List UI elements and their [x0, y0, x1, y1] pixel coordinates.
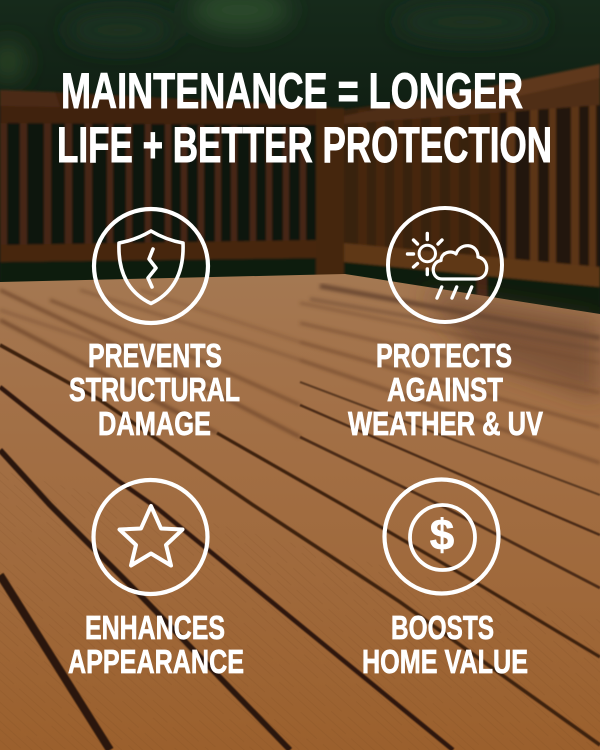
benefit: prevents structural damage [69, 209, 240, 443]
label: enhances appearance: APPEARANCE [68, 644, 244, 681]
deck shadows at far end [420, 290, 600, 400]
label: prevents structural damage: DAMAGE [98, 406, 211, 443]
label: protects against weather and UV: AGAINST [387, 372, 503, 409]
label: protects against weather and UV [348, 338, 543, 443]
title [57, 62, 552, 173]
benefit: protects against weather and UV [348, 208, 543, 443]
label: protects against weather and UV: PROTECTS [376, 338, 512, 375]
background: railing [0, 64, 600, 320]
label: prevents structural damage: PREVENTS [88, 338, 222, 375]
benefit: enhances appearance [68, 480, 244, 681]
background: wooden deck boards [0, 274, 600, 750]
label: enhances appearance: ENHANCES [85, 610, 225, 647]
label: boosts home value: HOME VALUE [362, 644, 528, 681]
label: boosts home value [362, 610, 528, 681]
icon: cracked shield [94, 209, 208, 323]
label: protects against weather and UV: WEATHER & UV [348, 406, 543, 443]
label: enhances appearance [68, 610, 244, 681]
label: prevents structural damage [69, 338, 240, 443]
label: prevents structural damage: STRUCTURAL [69, 372, 240, 409]
icon: sun, cloud and rain [388, 208, 502, 322]
icon: dollar coin [384, 480, 498, 594]
background: forest behind deck [0, 0, 600, 320]
benefit: boosts home value [362, 480, 528, 681]
label: boosts home value: BOOSTS [391, 610, 494, 647]
icon: star [94, 480, 208, 594]
icon: dollar coin: $ [430, 511, 454, 560]
